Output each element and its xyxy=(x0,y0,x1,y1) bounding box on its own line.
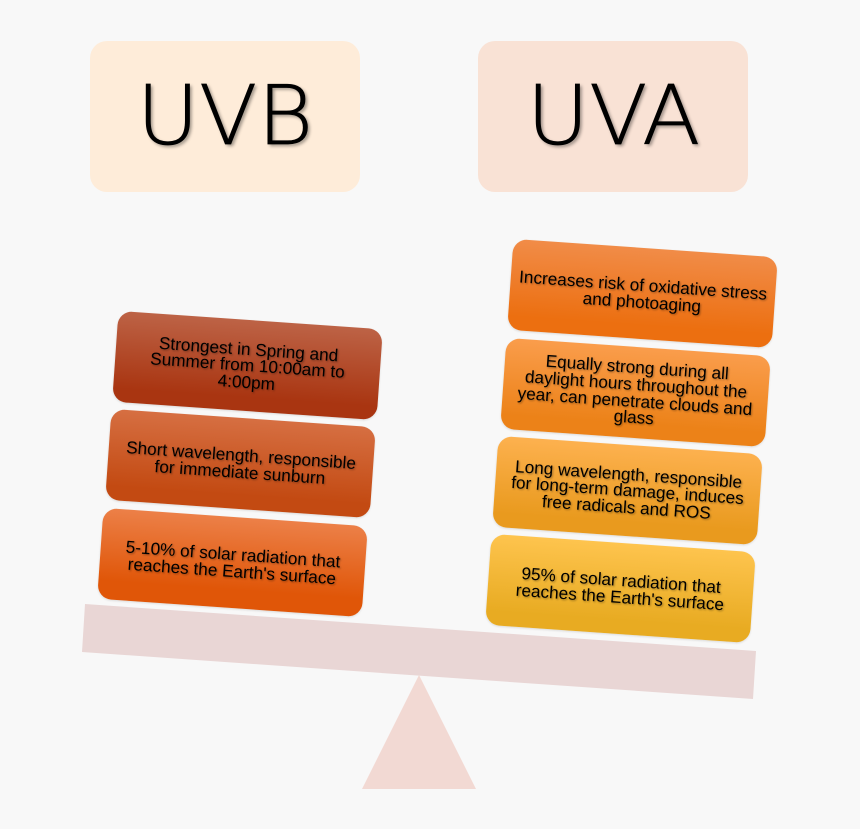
card: UVA oxidative stress: Increases risk of oxidative stress xyxy=(519,266,768,304)
card: UVB strongest: 4:00pm xyxy=(217,370,276,394)
card: UVA oxidative stress xyxy=(507,239,778,348)
card: UVA equally strong xyxy=(500,338,771,447)
scale fulcrum xyxy=(362,675,476,789)
card: UVA oxidative stress: and photoaging xyxy=(582,287,702,316)
scale beam xyxy=(82,604,756,699)
card: UVA equally strong: Equally strong during all xyxy=(545,351,729,384)
card: UVB strongest xyxy=(112,311,383,420)
card: UVA equally strong: daylight hours throughout the xyxy=(524,366,748,402)
heading: UVA xyxy=(478,41,748,192)
heading: UVA: UVA xyxy=(526,69,700,164)
card: UVA equally strong: glass xyxy=(613,406,654,428)
card: UVA solar radiation: reaches the Earth's surface xyxy=(515,579,725,614)
card: UVB short wavelength xyxy=(105,409,376,518)
card: UVB strongest: Summer from 10:00am to xyxy=(150,348,345,382)
card: UVA long wavelength: Long wavelength, responsible xyxy=(515,456,743,492)
card: UVB solar radiation xyxy=(97,508,368,617)
card: UVB short wavelength: for immediate sunburn xyxy=(154,456,326,487)
card: UVB solar radiation: 5-10% of solar radiation that xyxy=(125,536,341,571)
card: UVB strongest: Strongest in Spring and xyxy=(158,332,339,365)
card: UVA long wavelength: free radicals and ROS xyxy=(541,491,711,523)
card: UVB short wavelength: Short wavelength, responsible xyxy=(126,437,357,473)
heading: UVB: UVB xyxy=(137,69,313,164)
card: UVA solar radiation: 95% of solar radiation that xyxy=(521,563,721,597)
card: UVA long wavelength: for long-term damage, induces xyxy=(511,472,744,508)
heading: UVB xyxy=(90,41,360,192)
card: UVA long wavelength xyxy=(492,436,763,545)
card: UVB solar radiation: reaches the Earth's surface xyxy=(127,553,337,588)
card: UVA equally strong: year, can penetrate clouds and xyxy=(517,382,753,419)
card: UVA solar radiation xyxy=(485,534,756,643)
